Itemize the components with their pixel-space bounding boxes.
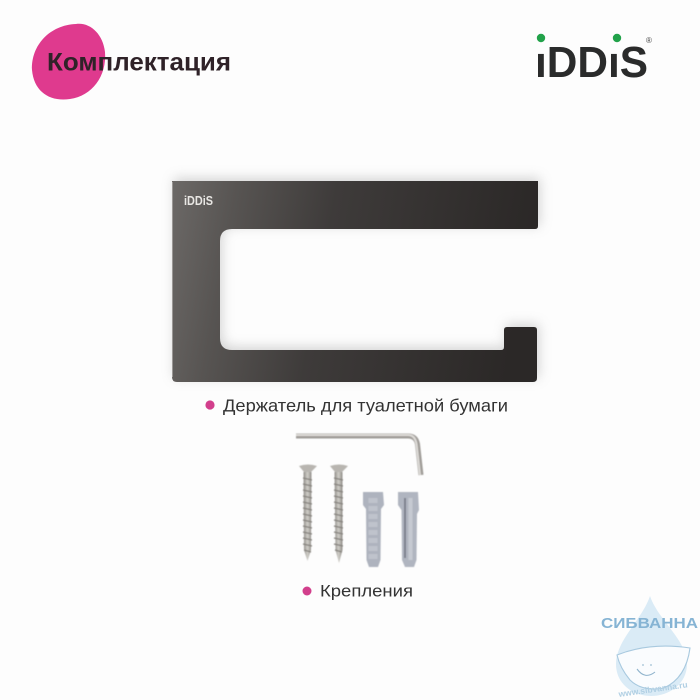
pink blob — [32, 24, 105, 100]
bathtub face — [637, 665, 655, 675]
holder shadow — [174, 178, 540, 378]
label: holder — [205, 396, 508, 416]
holder light left edge — [172, 182, 174, 377]
wall plug 1 — [363, 492, 384, 567]
screw thread — [334, 478, 343, 552]
heading text: Комплектация — [47, 48, 231, 76]
screw head — [330, 464, 348, 472]
holder body — [172, 181, 538, 382]
screw shaft — [304, 472, 312, 561]
watermark url: www.sibvanna.ru — [617, 679, 688, 699]
logo wordmark: ıDDıS — [535, 38, 648, 87]
heading: Комплектация with pink blob — [32, 24, 231, 100]
product: toilet paper holder — [172, 178, 540, 382]
screw shaft — [334, 472, 342, 563]
watermark: Сибванна — [601, 596, 699, 699]
bullet — [302, 586, 312, 596]
screw head — [299, 464, 317, 472]
screw thread — [303, 478, 312, 552]
watermark name: СИБВАННА — [601, 616, 699, 632]
hex key — [296, 435, 421, 475]
wall plug 2 — [398, 492, 419, 567]
logo: IDDIS — [535, 34, 652, 87]
label text: Держатель для туалетной бумаги — [223, 396, 508, 416]
bathtub — [617, 646, 690, 689]
screw 2 — [330, 464, 348, 563]
label text: Крепления — [320, 582, 413, 600]
screw 1 — [299, 464, 317, 561]
label: fasteners — [302, 582, 413, 600]
logo dots — [537, 34, 621, 42]
holder brand mark: iDDiS — [184, 194, 213, 208]
water drop — [616, 596, 687, 696]
registered mark: ® — [646, 36, 652, 45]
bullet — [205, 400, 215, 410]
